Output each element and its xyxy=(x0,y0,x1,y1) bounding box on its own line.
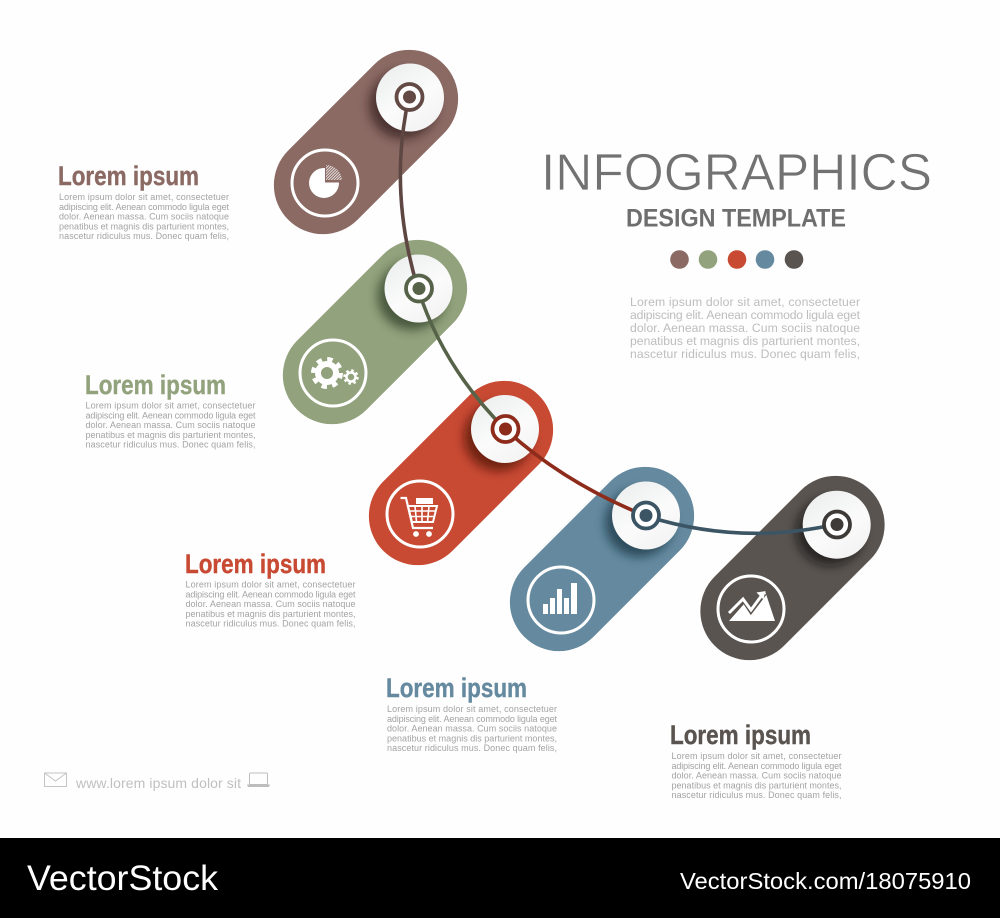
text block: step 1: Lorem ipsum xyxy=(58,161,199,191)
connector: step 3 to 4 xyxy=(505,429,646,516)
connector: step 1 to 2 xyxy=(400,97,418,289)
intro paragraph: adipiscing elit. Aenean commodo ligula eget xyxy=(630,308,861,322)
text block: step 3: Lorem ipsum xyxy=(185,549,326,579)
icon: gears xyxy=(300,340,366,406)
intro paragraph xyxy=(630,295,861,361)
subtitle: DESIGN TEMPLATE xyxy=(626,204,846,232)
text block: step 4: dolor. Aenean massa. Cum sociis natoque xyxy=(387,724,557,734)
intro paragraph: nascetur ridiculus mus. Donec quam felis, xyxy=(630,347,860,361)
icon: shopping cart xyxy=(387,481,453,547)
intro paragraph: Lorem ipsum dolor sit amet, consectetuer xyxy=(630,295,860,309)
icon: bar chart xyxy=(528,567,594,633)
text block: step 2 xyxy=(85,370,256,450)
connector: step 2 to 3 xyxy=(418,289,505,429)
footer url: VectorStock.com/18075910 xyxy=(680,868,971,894)
icon: pie chart xyxy=(292,150,358,216)
text block: step 1: nascetur ridiculus mus. Donec quam felis, xyxy=(59,231,229,241)
text block: step 4: penatibus et magnis dis parturient montes, xyxy=(387,734,557,744)
website text: www.lorem ipsum dolor sit xyxy=(75,775,241,791)
icon: laptop xyxy=(247,773,270,787)
text block: step 4: Lorem ipsum dolor sit amet, consectetuer xyxy=(387,704,557,714)
footer bar xyxy=(0,838,1000,918)
panel: red capsule step 3 xyxy=(368,380,554,566)
text block: step 5: nascetur ridiculus mus. Donec quam felis, xyxy=(672,790,842,800)
intro paragraph: dolor. Aenean massa. Cum sociis natoque xyxy=(630,321,860,335)
node: step 5 xyxy=(824,512,850,538)
icon: mountain trend xyxy=(718,576,784,642)
text block: step 3: dolor. Aenean massa. Cum sociis natoque xyxy=(186,599,356,609)
text block: step 4: adipiscing elit. Aenean commodo ligula eget xyxy=(387,714,557,724)
text block: step 3 xyxy=(185,549,356,628)
panel: blue capsule step 4 xyxy=(510,466,694,652)
text block: step 5: penatibus et magnis dis parturient montes, xyxy=(672,780,842,790)
connector: step 4 to 5 xyxy=(646,516,837,533)
icon: envelope xyxy=(44,773,66,786)
intro paragraph: penatibus et magnis dis parturient montes, xyxy=(630,334,860,348)
node: step 3 xyxy=(492,416,518,442)
text block: step 1: Lorem ipsum dolor sit amet, consectetuer xyxy=(59,192,229,202)
text block: step 5: adipiscing elit. Aenean commodo ligula eget xyxy=(672,761,842,771)
text block: step 2: adipiscing elit. Aenean commodo ligula eget xyxy=(86,410,256,420)
text block: step 4 xyxy=(386,673,557,753)
text block: step 5 xyxy=(670,720,842,800)
panel: brown capsule step 1 xyxy=(274,50,458,234)
text block: step 5: Lorem ipsum xyxy=(670,720,811,750)
node: step 1 xyxy=(396,84,422,110)
text block: step 2: penatibus et magnis dis parturient montes, xyxy=(86,430,256,440)
text block: step 3: penatibus et magnis dis parturient montes, xyxy=(186,609,356,619)
text block: step 2: Lorem ipsum xyxy=(85,370,226,400)
text block: step 4: Lorem ipsum xyxy=(386,673,527,703)
colour legend dots xyxy=(670,250,803,269)
node: step 4 xyxy=(633,502,659,528)
text block: step 3: nascetur ridiculus mus. Donec quam felis, xyxy=(186,618,356,628)
text block: step 2: dolor. Aenean massa. Cum sociis natoque xyxy=(86,420,256,430)
text block: step 1: adipiscing elit. Aenean commodo ligula eget xyxy=(59,202,229,212)
footer brand: VectorStock xyxy=(27,859,219,898)
text block: step 2: Lorem ipsum dolor sit amet, consectetuer xyxy=(86,400,256,410)
text block: step 1: dolor. Aenean massa. Cum sociis natoque xyxy=(59,212,229,222)
node: step 2 xyxy=(406,276,432,302)
text block: step 1 xyxy=(58,161,229,241)
text block: step 4: nascetur ridiculus mus. Donec quam felis, xyxy=(387,743,557,753)
text block: step 5: dolor. Aenean massa. Cum sociis natoque xyxy=(672,770,842,780)
text block: step 5: Lorem ipsum dolor sit amet, consectetuer xyxy=(672,751,842,761)
text block: step 2: nascetur ridiculus mus. Donec quam felis, xyxy=(86,440,256,450)
panel: green capsule step 2 xyxy=(282,240,468,424)
text block: step 1: penatibus et magnis dis parturient montes, xyxy=(59,222,229,232)
title: INFOGRAPHICS xyxy=(541,144,932,202)
text block: step 3: adipiscing elit. Aenean commodo ligula eget xyxy=(186,590,356,600)
panel: dark capsule step 5 xyxy=(700,476,885,660)
text block: step 3: Lorem ipsum dolor sit amet, consectetuer xyxy=(186,580,356,590)
